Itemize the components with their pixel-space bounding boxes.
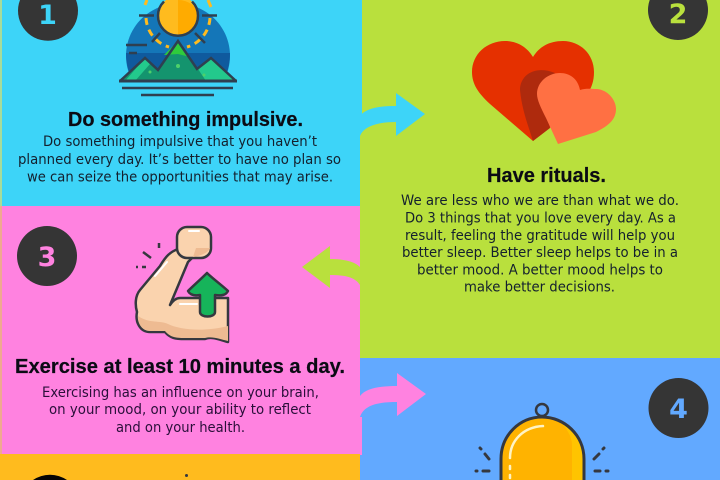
text: step 3 body: on your mood, on your ability to reflect bbox=[49, 402, 311, 418]
text: step 2 body: result, feeling the gratitude will help you bbox=[405, 228, 675, 244]
heading: step 2: Have rituals. bbox=[487, 165, 606, 187]
text: step 1 body: we can seize the opportunities that may arise. bbox=[27, 170, 333, 186]
text: step 2 body: better mood. A better mood helps to bbox=[417, 262, 663, 278]
text: step 1 body bbox=[18, 134, 341, 186]
icon: bell bbox=[476, 404, 608, 480]
panel: step 1 background bbox=[0, 0, 360, 206]
text: step 2 body: better sleep. Better sleep helps to be in a bbox=[402, 245, 678, 261]
arrow: step 3 to step 4 bbox=[360, 373, 426, 455]
text: step 1 body: Do something impulsive that you haven’t bbox=[43, 134, 317, 150]
icon: sun over mountains bbox=[119, 0, 237, 95]
text: step 3 body: Exercising has an influence on your brain, bbox=[42, 385, 319, 401]
panel: step 4 background bbox=[360, 358, 720, 480]
icon: step 5 top dot bbox=[185, 474, 188, 477]
text: step 2 body: We are less who we are than what we do. bbox=[401, 193, 679, 209]
panel: step 2 background bbox=[360, 0, 720, 358]
numeral 1: 1 bbox=[38, 0, 57, 31]
badge: number 4: 4 bbox=[669, 394, 688, 425]
icon: flexed arm with up arrow bbox=[136, 227, 228, 342]
badge: number 4 bbox=[648, 378, 708, 438]
text: step 3 body: and on your health. bbox=[116, 420, 245, 436]
text: step 2 body: make better decisions. bbox=[464, 280, 615, 296]
badge: number 5 bbox=[33, 475, 67, 480]
badge: number 3 bbox=[17, 226, 77, 286]
heading: step 3: Exercise at least 10 minutes a day. bbox=[15, 356, 345, 378]
text: step 2 body: Do 3 things that you love every day. As a bbox=[405, 210, 676, 226]
icon: two hearts bbox=[472, 41, 616, 144]
badge: number 3: 3 bbox=[38, 242, 56, 273]
panel: step 5 background bbox=[0, 454, 360, 480]
badge: number 1 bbox=[18, 0, 78, 41]
text: step 3 body bbox=[42, 385, 319, 436]
text: step 2 body bbox=[401, 193, 679, 296]
heading: step 1: Do something impulsive. bbox=[68, 109, 303, 131]
text: step 1 body: planned every day. It’s better to have no plan so bbox=[18, 152, 341, 168]
badge: number 2 bbox=[648, 0, 708, 40]
panel: step 3 background bbox=[0, 206, 360, 454]
arrow: step 2 to step 3 bbox=[302, 246, 360, 288]
arrow: step 1 to step 2 bbox=[360, 93, 425, 136]
